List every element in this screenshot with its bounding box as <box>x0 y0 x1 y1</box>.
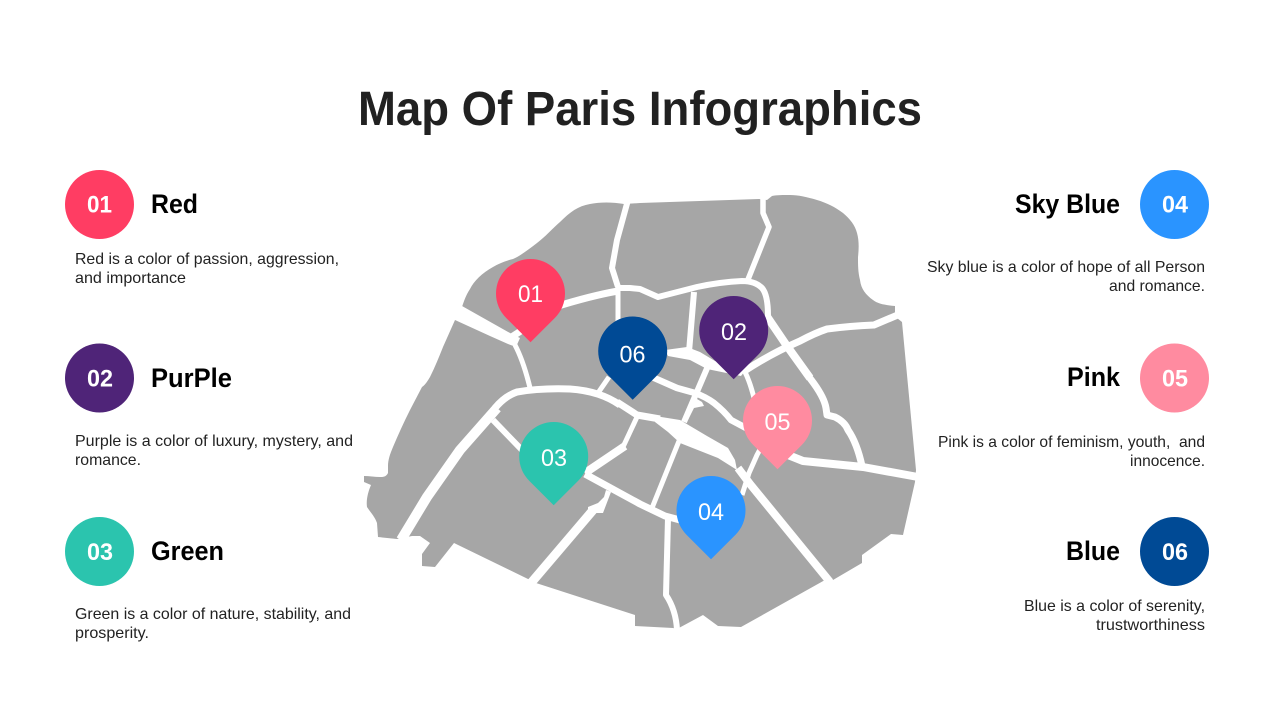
description: purple: Purple is a color of luxury, mystery, and <box>75 433 353 450</box>
description: blue <box>1024 598 1205 634</box>
map pin 01 <box>496 259 565 342</box>
description: pink: Pink is a color of feminism, youth, and <box>938 434 1205 451</box>
description: sky blue <box>927 259 1205 295</box>
badge: 04 <box>1140 170 1209 239</box>
panel: 01 red <box>65 170 339 287</box>
badge: 03: 03 <box>87 539 113 566</box>
description: sky blue: and romance. <box>1109 278 1205 295</box>
description: pink: innocence. <box>1130 453 1205 470</box>
description: green: prosperity. <box>75 625 149 642</box>
badge: 05 <box>1140 344 1209 412</box>
map pin 02 <box>699 296 768 379</box>
description: sky blue: Sky blue is a color of hope of all Person <box>927 259 1205 276</box>
badge: 01: 01 <box>87 192 112 218</box>
heading: green: Green <box>151 536 224 566</box>
description: blue: trustworthiness <box>1096 617 1205 634</box>
description: green: Green is a color of nature, stability, and <box>75 606 351 623</box>
panel: 05 pink <box>938 344 1209 470</box>
badge: 06: 06 <box>1162 539 1188 566</box>
heading: blue: Blue <box>1066 536 1120 566</box>
badge: 02 <box>65 344 134 412</box>
panel: 03 green <box>65 517 351 642</box>
heading: purple: PurPle <box>151 363 232 393</box>
description: pink <box>938 434 1205 470</box>
description: green <box>75 606 351 642</box>
map pin 05 <box>743 386 812 469</box>
description: red <box>75 251 339 287</box>
map pin 05: 05 <box>764 409 790 436</box>
heading: pink: Pink <box>1067 362 1121 392</box>
description: blue: Blue is a color of serenity, <box>1024 598 1205 615</box>
badge: 06 <box>1140 517 1209 586</box>
map pin 04 <box>676 476 746 559</box>
badge: 04: 04 <box>1162 192 1189 218</box>
map pin 03 <box>519 422 588 505</box>
map pin 06: 06 <box>620 342 646 368</box>
map pin 04: 04 <box>698 499 724 526</box>
description: red: Red is a color of passion, aggression, <box>75 251 339 268</box>
title: Map Of Paris Infographics <box>358 83 922 136</box>
map pin 02: 02 <box>721 319 747 346</box>
description: purple <box>75 433 353 469</box>
badge: 01 <box>65 170 134 239</box>
description: red: and importance <box>75 270 186 287</box>
map pin 01: 01 <box>518 281 543 308</box>
badge: 02: 02 <box>87 366 113 392</box>
panel: 04 sky blue <box>927 170 1209 295</box>
description: purple: romance. <box>75 452 141 469</box>
streets <box>401 196 918 630</box>
panel: 06 blue <box>1024 517 1209 634</box>
map pin 06 <box>598 317 667 400</box>
heading: sky blue: Sky Blue <box>1015 189 1120 219</box>
panel: 02 purple <box>65 344 353 469</box>
map pin 03: 03 <box>541 445 567 472</box>
heading: red: Red <box>151 189 198 219</box>
badge: 05: 05 <box>1162 366 1188 392</box>
badge: 03 <box>65 517 134 586</box>
map of Paris <box>364 195 918 630</box>
